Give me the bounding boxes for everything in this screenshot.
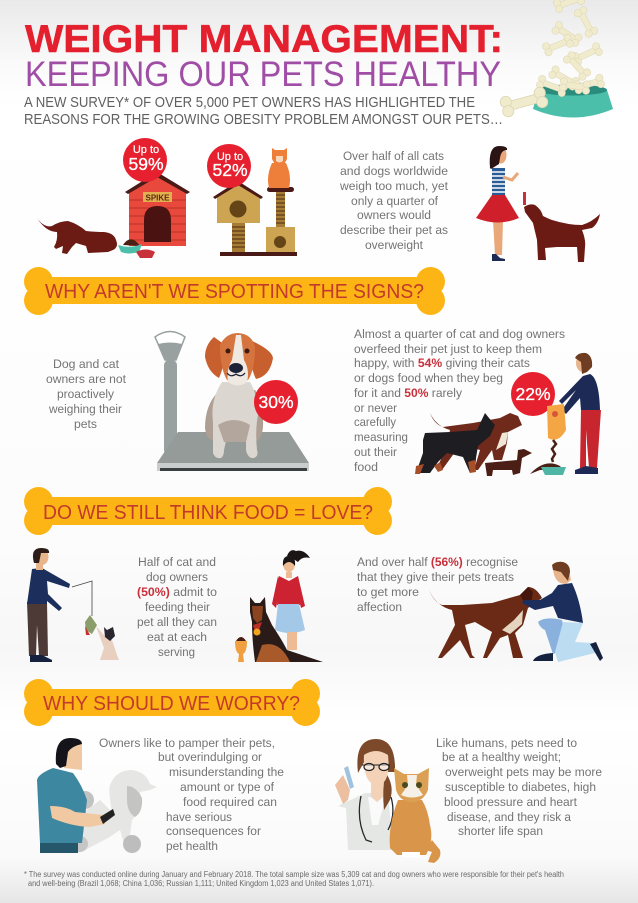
cat (96, 626, 119, 660)
text: over half: only a quarter of (351, 194, 439, 208)
badge: 30%: 30% (258, 392, 294, 412)
text: like humans (436, 736, 602, 838)
dachshund (485, 449, 532, 476)
illustration: three dogs (415, 413, 532, 476)
section heading: do we still think food = love: DO WE STILL THINK FOOD = LOVE? (43, 502, 373, 524)
boxer (430, 413, 522, 470)
illustration: man pouring food (530, 353, 601, 475)
badge: 59% (123, 138, 167, 182)
badge: 52% (207, 144, 251, 188)
vet head (357, 739, 395, 773)
text: pamper: pet health (166, 839, 218, 853)
illustration: vet with cat (335, 739, 440, 863)
text: pamper: Owners like to pamper their pets, (99, 736, 275, 750)
text: pamper: amount or type of (180, 780, 275, 794)
section heading: why should we worry (24, 679, 320, 726)
food bag (547, 404, 566, 440)
badge: 22%: 22% (515, 384, 551, 404)
text: pamper: food required can (183, 795, 277, 809)
text: half of cat and dog owners: dog owners (146, 570, 208, 584)
text: overfeed: carefully (354, 415, 397, 429)
illustration: cat tree (213, 148, 297, 256)
illustration: man kneeling with dog (429, 562, 603, 662)
text: over half: and dogs worldwide (340, 164, 448, 178)
illustration: woman with shepherd dog (235, 550, 323, 662)
section heading: why aren't we spotting the signs: WHY AREN'T WE SPOTTING THE SIGNS? (45, 281, 424, 303)
food bowls (123, 239, 140, 246)
text: overfeed: Almost a quarter of cat and dog owners (354, 327, 565, 341)
illustration: red dog begging (523, 192, 600, 262)
text: overfeed: or never (354, 401, 397, 415)
cat on tree (268, 163, 290, 188)
vet coat (338, 793, 393, 850)
text: like humans: be at a healthy weight; (442, 750, 561, 764)
badge: 52%: Up to (217, 151, 243, 163)
text: over half recognise: affection (357, 600, 402, 614)
text: pamper: but overindulging or (158, 750, 262, 764)
text: overfeed: or dogs food when they beg (354, 371, 503, 385)
text: like humans: disease, and they risk a (447, 810, 571, 824)
text: over half: weigh too much, yet (339, 179, 449, 193)
text: over half recognise: And over half (56%) recognise (357, 555, 518, 569)
text: not weighing: weighing their (48, 402, 122, 416)
text: half of cat and dog owners: feeding their (145, 600, 210, 614)
intro text (24, 94, 503, 128)
treat trophy (236, 637, 246, 641)
text: not weighing: pets (74, 417, 97, 431)
text: not weighing: Dog and cat (53, 357, 120, 371)
section heading: do we still think food = love (24, 487, 392, 535)
text: overfeed: overfeed their pet just to keep them (354, 342, 542, 356)
text: over half recognise (357, 555, 518, 614)
text: pamper: misunderstanding the (169, 765, 284, 779)
illustration: dog eating beside kennel (37, 172, 190, 258)
footnote: * The survey was conducted online during January and February 2018. The total sample size was 5,309 cat and dog owners who were responsible for their pet's health (24, 870, 564, 879)
text: overfeed: out their (354, 445, 397, 459)
text: like humans: shorter life span (458, 824, 543, 838)
poodle (75, 770, 157, 850)
cat (390, 800, 431, 855)
intro text: REASONS FOR THE GROWING OBESITY PROBLEM AMONGST OUR PETS… (24, 111, 503, 128)
text: half of cat and dog owners (137, 555, 217, 659)
subtitle: KEEPING OUR PETS HEALTHY (25, 55, 501, 94)
text: not weighing (46, 357, 127, 431)
hand and syringe (335, 775, 350, 804)
dog lying (37, 218, 117, 254)
badge: 59%: 59% (128, 154, 164, 174)
text: over half recognise: that they give their pets treats (357, 570, 514, 584)
brown dog (429, 587, 542, 658)
text: half of cat and dog owners: (50%) admit to (137, 585, 217, 599)
text: overfeed: measuring (354, 430, 408, 444)
text: half of cat and dog owners: eat at each (147, 630, 207, 644)
footnote (24, 870, 564, 888)
text: not weighing: proactively (57, 387, 115, 401)
dog (250, 597, 323, 662)
illustration: dog eating beside kennel: SPIKE (145, 194, 170, 202)
text: like humans: overweight pets may be more (445, 765, 602, 779)
text: overfeed: happy, with 54% giving their cats (354, 356, 530, 370)
text: like humans: susceptible to diabetes, high (445, 780, 596, 794)
text: like humans: Like humans, pets need to (436, 736, 577, 750)
title: WEIGHT MANAGEMENT: (25, 18, 503, 61)
section heading: why aren't we spotting the signs (24, 267, 445, 315)
text: over half recognise: to get more (357, 585, 419, 599)
badge: 22% (511, 372, 555, 416)
text: half of cat and dog owners: Half of cat and (138, 555, 216, 569)
kennel (129, 175, 186, 246)
text: pamper (99, 736, 284, 853)
illustration: weighing scale (155, 332, 309, 471)
man (40, 840, 78, 853)
section heading: why should we worry: WHY SHOULD WE WORRY? (43, 693, 300, 715)
illustration: woman in red skirt (476, 146, 519, 261)
text: pamper: consequences for (166, 824, 261, 838)
text: over half: overweight (365, 238, 424, 252)
illustration: man grooming poodle (37, 738, 157, 853)
text: like humans: blood pressure and heart (444, 795, 578, 809)
text: over half: describe their pet as (340, 223, 448, 237)
text: half of cat and dog owners: serving (158, 645, 195, 659)
footnote: and well-being (Brazil 1,068; China 1,036; Russian 1,111; United Kingdom 1,023 and United States 1,071). (28, 879, 374, 888)
text: half of cat and dog owners: pet all they can (137, 615, 217, 629)
text: overfeed (354, 327, 565, 474)
text: over half: Over half of all cats (343, 149, 444, 163)
man (553, 566, 571, 584)
icon: bowl with falling bones (499, 0, 613, 118)
text: over half (339, 149, 449, 252)
illustration: man with cat toy (27, 548, 119, 662)
intro text: A NEW SURVEY* OF OVER 5,000 PET OWNERS HAS HIGHLIGHTED THE (24, 94, 475, 111)
text: over half: owners would (357, 208, 431, 222)
badge: 52%: 52% (212, 160, 248, 180)
food stream and bowl (552, 440, 556, 462)
text: overfeed: for it and 50% rarely (354, 386, 463, 400)
text: overfeed: food (354, 460, 378, 474)
black dog (416, 413, 495, 473)
badge: 30% (254, 380, 298, 424)
boxer chest (496, 432, 508, 450)
badge: 59%: Up to (133, 144, 159, 156)
text: not weighing: owners are not (46, 372, 127, 386)
text: pamper: have serious (166, 810, 232, 824)
illustration: beagle (205, 333, 273, 458)
